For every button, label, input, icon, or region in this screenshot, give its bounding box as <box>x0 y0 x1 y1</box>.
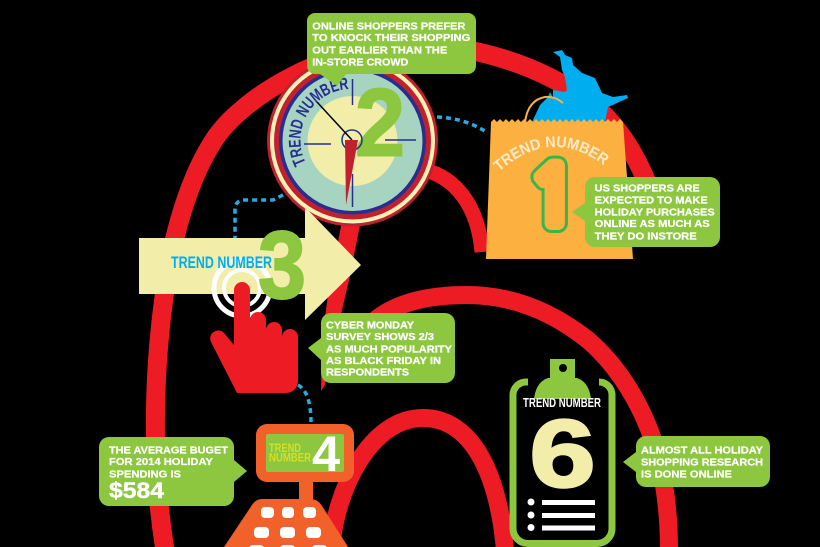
red path: clock to survey callout <box>321 205 364 391</box>
callout: research online: SHOPPING RESEARCH <box>641 458 763 469</box>
trend 6: clipboard <box>513 359 612 544</box>
bag number 1: 1 <box>529 158 577 236</box>
callout: online shoppers: TO KNOCK THEIR SHOPPING <box>312 33 470 44</box>
callout: US shoppers: EXPECTED TO MAKE <box>595 195 708 206</box>
clock label: TREND NUMBER <box>288 78 349 168</box>
register number 4: 4 <box>312 426 340 482</box>
callout: cyber monday: SURVEY SHOWS 2/3 <box>326 332 434 343</box>
red path: inner arch <box>331 418 505 547</box>
callout: average budget: SPENDING IS <box>109 469 181 480</box>
callout: average budget <box>99 437 247 506</box>
bag label: TREND NUMBER <box>492 136 608 170</box>
clipboard number 6: 6 <box>530 400 596 508</box>
arrow number 3: 3 <box>258 212 306 319</box>
clipboard label: TREND NUMBER <box>523 395 601 410</box>
callout: cyber monday: AS MUCH POPULARITY <box>326 344 452 355</box>
arrow label: TREND NUMBER <box>171 254 272 272</box>
callout: research online: ALMOST ALL HOLIDAY <box>641 445 763 456</box>
callout: US shoppers: ONLINE AS MUCH AS <box>595 219 710 230</box>
callout: US shoppers <box>572 177 720 247</box>
trend 1: USA map <box>532 50 628 122</box>
callout: online shoppers <box>307 13 476 86</box>
callout: cyber monday: RESPONDENTS <box>326 368 409 379</box>
trend 4: cash register <box>222 424 354 547</box>
trend 3: arrow <box>139 207 361 320</box>
callout: US shoppers: US SHOPPERS ARE <box>595 184 700 195</box>
dotted connector: hand to register <box>298 385 311 423</box>
bag number 1: 1 <box>529 158 577 236</box>
callout: cyber monday: AS BLACK FRIDAY IN <box>326 356 441 367</box>
callout: cyber monday <box>308 313 455 383</box>
register keys <box>249 507 327 547</box>
clipboard list <box>528 498 595 531</box>
callout: research online <box>623 436 770 487</box>
callout: online shoppers: ONLINE SHOPPERS PREFER <box>312 22 466 32</box>
callout: average budget: FOR 2014 HOLIDAY <box>109 457 213 468</box>
icon: pointing hand <box>210 282 298 393</box>
trend 2: clock <box>267 68 438 226</box>
register label: TREND <box>269 443 301 455</box>
red path: clock to bag <box>425 170 482 252</box>
callout: US shoppers: THEY DO INSTORE <box>595 231 697 242</box>
register label: NUMBER <box>269 452 312 464</box>
callout: online shoppers: IN-STORE CROWD <box>312 57 409 68</box>
dotted connector: clock to bag <box>437 117 488 133</box>
callout: cyber monday: CYBER MONDAY <box>326 320 414 331</box>
budget amount: $584 <box>109 478 165 503</box>
red path: middle arch <box>370 295 669 547</box>
callout: average budget: THE AVERAGE BUGET <box>109 445 229 456</box>
clock number 2: 2 <box>355 70 405 176</box>
red path: outer arch <box>155 45 665 547</box>
dotted connector: clock to arrow <box>235 195 283 238</box>
callout: online shoppers: OUT EARLIER THAN THE <box>312 45 447 56</box>
callout: US shoppers: HOLIDAY PURCHASES <box>595 207 715 218</box>
callout: research online: IS DONE ONLINE <box>641 469 732 480</box>
trend 3: tap rings <box>214 260 270 316</box>
trend 1: shopping bag <box>486 96 633 259</box>
